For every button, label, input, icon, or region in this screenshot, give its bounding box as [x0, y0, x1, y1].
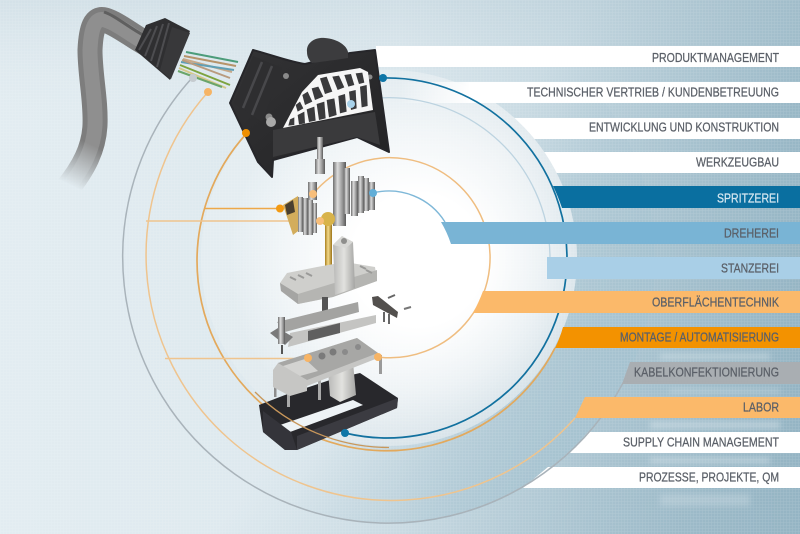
- connector arcs: [123, 78, 623, 523]
- dot: Montage comb: [276, 204, 284, 212]
- dot: Produktmanagement: [379, 74, 387, 82]
- bar: Dreherei: DREHEREI: [724, 226, 779, 240]
- terminal block: [273, 338, 382, 407]
- sensor pin: [315, 137, 325, 174]
- arc: Kabelkonfektionierung grey: [123, 78, 623, 523]
- white bar: Produktmanagement: [376, 46, 800, 67]
- cable boot: [135, 18, 190, 80]
- arc: Stanzerei light blue: [352, 98, 550, 258]
- wires: [178, 52, 238, 88]
- arc: Spritzerei blue: [345, 78, 567, 438]
- dot: Oberflaeche block left: [304, 354, 312, 362]
- label: Werkzeugbau: WERKZEUGBAU: [696, 156, 779, 170]
- connector dots: [189, 74, 387, 437]
- housing lower panel: [273, 112, 380, 157]
- plastic block: [280, 236, 377, 313]
- dot: Oberflaeche top: [309, 190, 317, 198]
- bar: Stanzerei: [547, 257, 800, 279]
- white bar: Entwicklung und Konstruktion: [510, 118, 800, 139]
- white bar: Technischer Vertrieb: [400, 82, 800, 103]
- bar: Montage / Automatisierung: [555, 327, 800, 348]
- bar: Kabelkonfektionierung: [622, 362, 800, 384]
- dot: Montage upper: [242, 129, 250, 137]
- bar: Labor: LABOR: [743, 401, 779, 415]
- dot: Oberflaeche block right: [374, 353, 382, 361]
- housing: [230, 38, 389, 177]
- bar: Kabelkonfektionierung: KABELKONFEKTIONIERUNG: [634, 366, 779, 380]
- white lattice: [283, 68, 373, 128]
- metal rails: [270, 302, 376, 354]
- inner disc: [201, 70, 577, 446]
- white bar: Supply Chain Management: [570, 432, 800, 453]
- dot: Spritzerei: [341, 429, 349, 437]
- line: Montage leader: [205, 208, 280, 210]
- bar: Oberflaechentechnik: [473, 291, 800, 313]
- dot: Kabelkonfektionierung: [189, 74, 197, 82]
- turned contacts: [308, 162, 375, 226]
- gold contact comb: [283, 196, 317, 235]
- dot: Dreherei: [369, 189, 377, 197]
- housing side barrel: [234, 56, 282, 122]
- white bar: Werkzeugbau: [540, 152, 800, 173]
- dot: Labor upper: [204, 88, 212, 96]
- bar: Stanzerei: STANZEREI: [721, 261, 779, 275]
- arc: Oberflaechentechnik orange: [313, 158, 490, 358]
- line: Labor leader: [146, 220, 290, 222]
- white bar: Prozesse, Projekte, QM: [523, 467, 800, 488]
- bar: Oberflaechentechnik: OBERFLÄCHENTECHNIK: [652, 296, 780, 310]
- gold pin: [321, 212, 335, 276]
- arc overlay on frame: [255, 392, 389, 448]
- bar: Labor: [575, 397, 800, 418]
- black frame: [259, 373, 398, 450]
- bar: Spritzerei: [553, 186, 800, 208]
- clip and screws: [372, 295, 411, 324]
- arc: Labor light orange: [146, 92, 575, 500]
- line: Oberflaechen leader: [165, 358, 308, 360]
- bar: Spritzerei: SPRITZEREI: [717, 191, 779, 205]
- dot: Stanzerei: [347, 100, 355, 108]
- knob: [307, 38, 348, 63]
- label: Produktmanagement: PRODUKTMANAGEMENT: [652, 51, 779, 65]
- arc: Dreherei blue: [373, 191, 445, 222]
- outer disc: [123, 0, 655, 524]
- arc: Montage orange: [197, 133, 555, 451]
- cable: [66, 12, 147, 190]
- dot: Labor comb: [316, 217, 324, 225]
- bar: Dreherei: [441, 222, 800, 244]
